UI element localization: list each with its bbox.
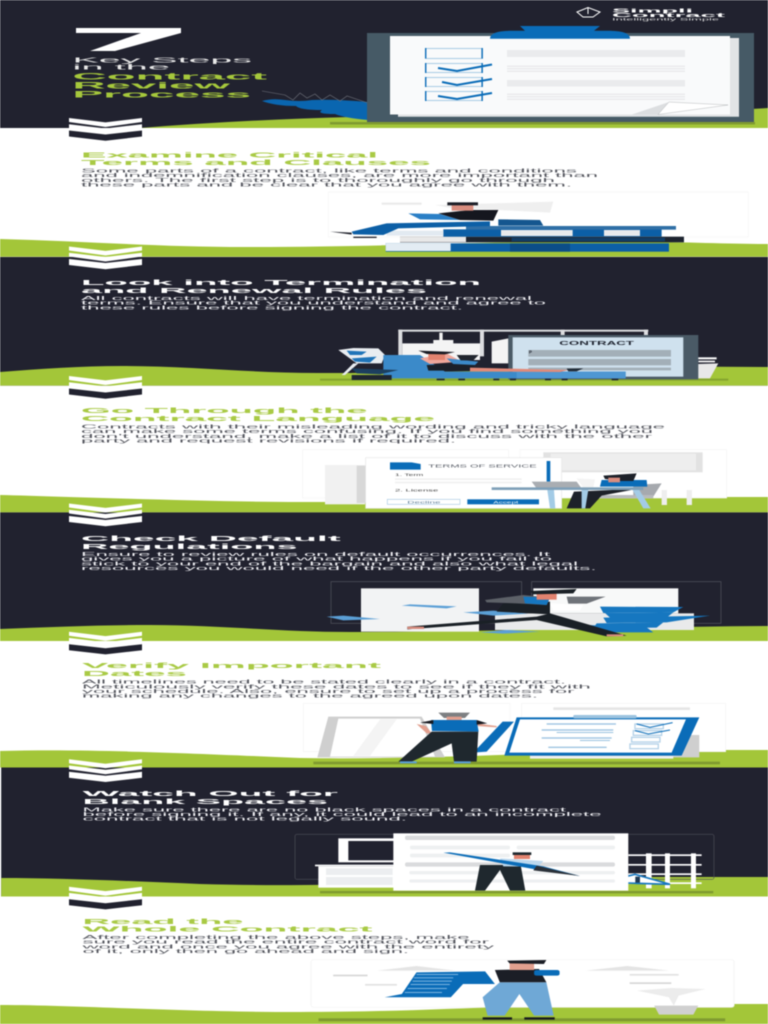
clip — [490, 26, 630, 39]
body text — [82, 935, 496, 955]
heading: key steps — [72, 55, 267, 99]
panel: step 2 termination and renewal — [0, 257, 768, 386]
heading — [81, 278, 483, 295]
body text — [81, 168, 599, 188]
body text: All timelines need to be stated clearly in a contract. — [82, 680, 566, 686]
heading: Blank Spaces — [82, 797, 328, 806]
illustration: running woman with papers — [327, 582, 721, 636]
illustration: person on books — [328, 192, 748, 252]
body text: of it, only then go ahead and sign. — [82, 949, 409, 955]
heading: key steps: Contract — [72, 71, 267, 81]
heading: Whole Contract — [82, 925, 375, 934]
logo: Contract — [612, 13, 726, 19]
chevron: step 7 — [69, 887, 142, 909]
body text: word and once you agree with the entirety — [82, 944, 496, 950]
checkboxes — [426, 48, 482, 100]
body text: Ensure to review rules on default occurrences. It — [81, 552, 553, 558]
heading — [81, 150, 431, 167]
body text — [81, 296, 547, 311]
body text: Contracts with their misleading wording and tricky language — [81, 424, 666, 430]
panel: step 3 contract language — [0, 386, 768, 513]
body text: making any changes to the agreed upon dates. — [82, 694, 538, 700]
illustration: terms of service and woman at desk — [303, 450, 727, 508]
body text — [81, 424, 666, 444]
body text: don't understand, make a list of it to discuss with the other — [81, 434, 653, 440]
body text: All contracts will have termination and renewal — [81, 296, 532, 302]
illustration: person with checklist clipboard — [303, 703, 726, 764]
body text — [81, 552, 597, 572]
body text: these rules before signing the contract. — [81, 305, 463, 311]
chevron: step 4 — [69, 504, 142, 526]
heading: Go Through the — [81, 406, 368, 415]
heading: Watch Out for — [82, 789, 338, 798]
illustration: woman on sofa with contract — [320, 330, 728, 381]
body text: before signing it. If any, it could lead to an incomplete — [82, 812, 602, 818]
illustration: terms of service and woman at desk: 2. License — [395, 488, 440, 493]
body text: After completing the above steps, make — [82, 935, 470, 941]
body text: terms. Ensure that you understand and agree to — [81, 301, 547, 307]
logo: Intelligently Simple — [612, 17, 720, 21]
chevron: step 1 — [69, 118, 142, 141]
heading — [81, 406, 435, 423]
illustration: person reading contract — [311, 960, 734, 1021]
chevron: step 5 — [69, 632, 142, 654]
heading — [82, 661, 384, 678]
body text: your schedule. Also, ensure to set up a process for — [82, 689, 576, 695]
panel: step 5 verify dates — [0, 641, 768, 768]
chevron: step 2 — [69, 246, 142, 269]
panel: step 6 blank spaces — [0, 768, 768, 896]
body text: Some parts of a contract, like terms and conditions — [81, 168, 579, 174]
heading: key steps: Review — [72, 80, 231, 90]
text lines — [507, 50, 685, 100]
logo: Simpli — [612, 9, 695, 15]
heading: key steps: Process — [72, 89, 252, 99]
heading: Examine Critical — [81, 150, 378, 160]
heading: Regulations — [81, 542, 298, 551]
body text — [82, 680, 592, 700]
heading: Terms and Clauses — [81, 158, 431, 167]
body text: these parts and be clear that you agree with them. — [81, 182, 572, 188]
illustration: splash and sketch — [262, 91, 368, 120]
body text: resources you would need if the other party defaults. — [81, 566, 597, 572]
heading: and Renewal Rules — [81, 286, 427, 295]
illustration: terms of service and woman at desk: Accept — [493, 500, 518, 504]
numeral 7 — [76, 28, 181, 51]
body text: party and request revisions if required. — [81, 438, 456, 444]
panel: step 1 examine critical terms — [0, 128, 768, 258]
heading: Dates — [82, 669, 187, 678]
heading: Look into Termination — [81, 278, 483, 287]
illustration: terms of service and woman at desk: TERMS OF SERVICE — [428, 464, 537, 469]
chevron: step 3 — [69, 376, 142, 399]
body text: Make sure there are no black spaces in a contract — [82, 807, 569, 813]
body text: and indemnification clauses, are more important than — [81, 173, 599, 179]
check marks — [438, 64, 492, 99]
heading: key steps: in the — [72, 62, 170, 72]
panel: header — [0, 0, 768, 128]
illustration: terms of service and woman at desk: Decline — [407, 500, 441, 504]
panel: step 7 read whole contract — [0, 896, 768, 1024]
body text: can make some terms confusing. If you find something you — [81, 429, 654, 435]
heading: key steps: Key Steps — [72, 55, 253, 64]
body text: others. The first step is to thoroughly go through — [81, 178, 556, 184]
heading: Check Default — [81, 534, 343, 543]
heading — [82, 789, 338, 806]
illustration: checklist clipboard — [330, 26, 755, 124]
panel: step 4 default regulations — [0, 512, 768, 641]
heading: Verify Important — [82, 661, 384, 670]
heading — [81, 534, 343, 551]
illustration: terms of service and woman at desk: 1. Term — [395, 472, 425, 477]
heading — [82, 917, 375, 934]
body text: stick to your end of the bargain and also what legal — [81, 561, 578, 567]
body text: sure you read the entire contract word for — [82, 940, 490, 946]
chevron: step 6 — [69, 759, 142, 782]
logo — [577, 8, 726, 21]
illustration: woman on sofa with contract: P — [529, 350, 532, 355]
body text: gives you a picture of what happens if you fail to — [81, 557, 553, 563]
illustration: man with pen over blank document — [295, 833, 714, 893]
body text — [82, 807, 602, 823]
body text: Meticulously verify these dates to see if they fit with — [82, 684, 592, 690]
body text: contract that is not legally sound. — [82, 817, 407, 823]
heading: Read the — [82, 917, 244, 926]
heading: Contract Language — [81, 414, 435, 423]
illustration: woman on sofa with contract: CONTRACT — [559, 341, 635, 347]
